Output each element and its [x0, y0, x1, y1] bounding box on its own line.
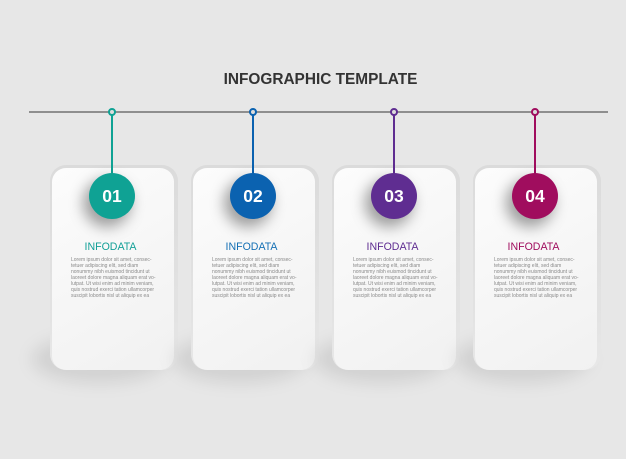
heading: INFODATA — [508, 241, 560, 253]
number disc 01 — [89, 173, 135, 219]
connector stem — [111, 110, 113, 175]
body text: Lorem ipsum dolor sit amet, consec- — [353, 257, 434, 263]
heading: INFODATA — [84, 241, 136, 253]
connector stem — [252, 110, 254, 175]
body text — [71, 257, 156, 299]
body text: laoreet dolore magna aliquam erat vo- — [353, 275, 438, 281]
panel: step 03 — [314, 108, 460, 386]
body text: tetuer adipiscing elit, sed diam — [71, 263, 138, 269]
card ground shadow — [455, 335, 590, 383]
timeline line — [29, 111, 608, 112]
body text: nonummy nibh euismod tincidunt ut — [212, 269, 291, 275]
body text: lutpat. Ut wisi enim ad minim veniam, — [494, 281, 577, 287]
body text: tetuer adipiscing elit, sed diam — [212, 263, 279, 269]
body text: nonummy nibh euismod tincidunt ut — [494, 269, 573, 275]
card ground shadow — [173, 335, 308, 383]
card surface — [193, 168, 315, 370]
number disc 03: 03 — [384, 186, 404, 206]
body text: quis nostrud exerci tation ullamcorper — [494, 287, 577, 293]
body text: nonummy nibh euismod tincidunt ut — [71, 269, 150, 275]
number disc 03 — [371, 173, 417, 219]
card ground shadow — [32, 335, 167, 383]
connector ring — [108, 108, 116, 116]
body text: tetuer adipiscing elit, sed diam — [494, 263, 561, 269]
panel: step 01 — [32, 108, 178, 386]
body text: suscipit lobortis nisl ut aliquip ex ea — [353, 293, 431, 299]
number disc 02 — [230, 173, 276, 219]
connector stem — [534, 110, 536, 175]
body text: nonummy nibh euismod tincidunt ut — [353, 269, 432, 275]
body text: laoreet dolore magna aliquam erat vo- — [494, 275, 578, 281]
card frame — [473, 165, 601, 370]
body text: lutpat. Ut wisi enim ad minim veniam, — [212, 281, 295, 287]
number disc 04 — [512, 173, 558, 219]
heading: INFODATA — [366, 241, 418, 253]
connector stem — [393, 110, 395, 175]
body text — [353, 257, 438, 299]
body text: quis nostrud exerci tation ullamcorper — [212, 287, 295, 293]
body text: Lorem ipsum dolor sit amet, consec- — [212, 257, 293, 263]
body text: laoreet dolore magna aliquam erat vo- — [212, 275, 296, 281]
number disc 04: 04 — [525, 186, 545, 206]
card surface — [52, 168, 174, 370]
card frame — [191, 165, 319, 370]
connector ring — [249, 108, 257, 116]
body text: suscipit lobortis nisl ut aliquip ex ea — [494, 293, 572, 299]
body text: Lorem ipsum dolor sit amet, consec- — [494, 257, 575, 263]
body text: laoreet dolore magna aliquam erat vo- — [71, 275, 156, 281]
number disc 01: 01 — [102, 186, 122, 206]
body text: Lorem ipsum dolor sit amet, consec- — [71, 257, 152, 263]
connector ring — [531, 108, 539, 116]
number disc shadow — [224, 179, 272, 227]
number disc shadow — [365, 179, 413, 227]
body text: lutpat. Ut wisi enim ad minim veniam, — [353, 281, 436, 287]
number disc shadow — [83, 179, 131, 227]
card surface — [475, 168, 597, 370]
body text: suscipit lobortis nisl ut aliquip ex ea — [212, 293, 290, 299]
card surface — [334, 168, 456, 370]
body text: quis nostrud exerci tation ullamcorper — [353, 287, 436, 293]
title: INFOGRAPHIC TEMPLATE — [224, 71, 417, 88]
body text: tetuer adipiscing elit, sed diam — [353, 263, 420, 269]
body text: suscipit lobortis nisl ut aliquip ex ea — [71, 293, 149, 299]
body text: lutpat. Ut wisi enim ad minim veniam, — [71, 281, 154, 287]
panel: step 02 — [174, 108, 319, 386]
card frame — [50, 165, 178, 370]
body text — [494, 257, 578, 299]
body text — [212, 257, 296, 299]
number disc 02: 02 — [243, 186, 263, 206]
heading: INFODATA — [226, 241, 278, 253]
panel: step 04 — [456, 108, 601, 386]
number disc shadow — [506, 179, 554, 227]
connector ring — [390, 108, 398, 116]
card frame — [332, 165, 460, 370]
body text: quis nostrud exerci tation ullamcorper — [71, 287, 154, 293]
card ground shadow — [314, 335, 449, 383]
